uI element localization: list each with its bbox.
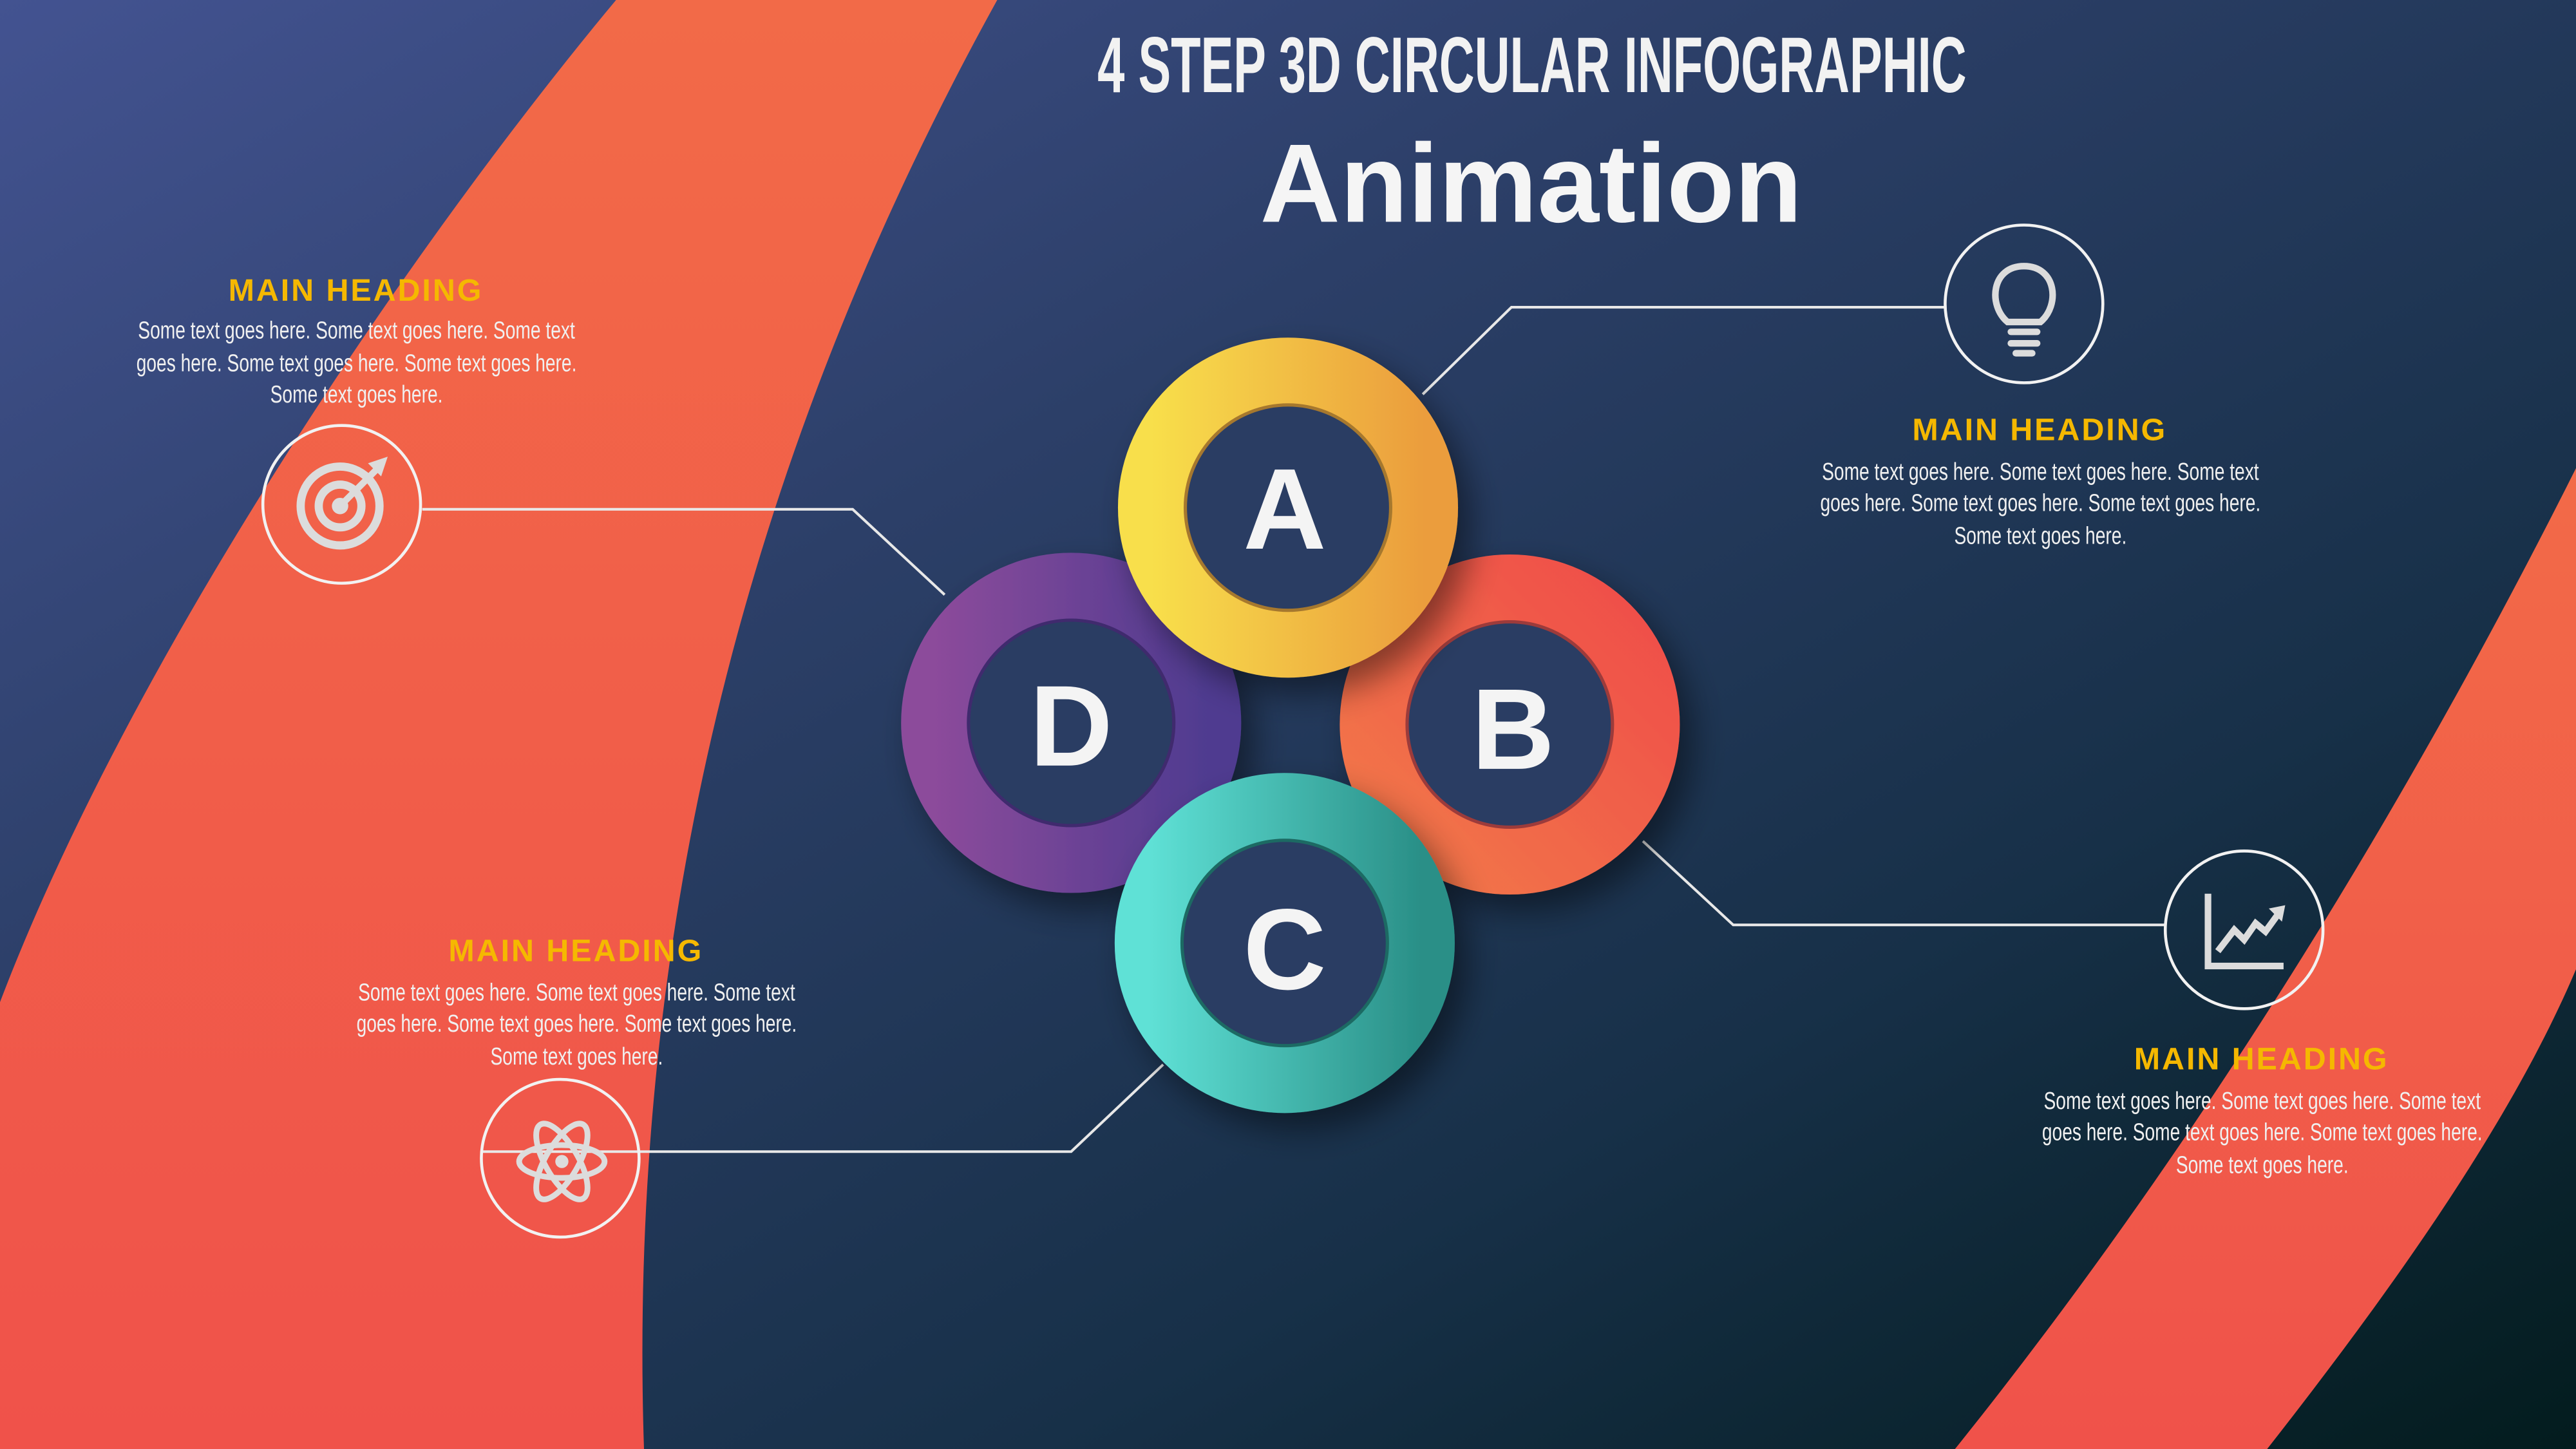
icon: lightbulb xyxy=(1945,225,2103,383)
text block: bottom right: MAIN HEADING xyxy=(2134,1042,2387,1077)
text block: top left: goes here. Some text goes here. Some text goes here. xyxy=(137,350,576,377)
text block: top left: Some text goes here. Some text goes here. Some text xyxy=(138,317,575,345)
subtitle: Animation xyxy=(1260,120,1802,245)
text block: top right xyxy=(1821,413,2260,549)
ring C xyxy=(1148,807,1421,1079)
connector: D xyxy=(422,509,945,594)
text block: bottom left: Some text goes here. Some text goes here. Some text xyxy=(358,979,795,1007)
text block: bottom left: MAIN HEADING xyxy=(448,933,701,968)
icon: chart xyxy=(2165,851,2323,1009)
text block: top left: Some text goes here. xyxy=(270,381,442,408)
text block: bottom left xyxy=(357,933,797,1070)
ring C: C xyxy=(1243,885,1326,1014)
text block: top right: goes here. Some text goes here. Some text goes here. xyxy=(1821,489,2260,516)
ring D: D xyxy=(1030,661,1113,790)
title: 4 STEP 3D CIRCULAR INFOGRAPHIC xyxy=(1097,21,1967,109)
ring B xyxy=(1374,588,1646,861)
text block: top right: Some text goes here. Some text goes here. Some text xyxy=(1822,458,2259,486)
text block: top right: Some text goes here. xyxy=(1954,522,2126,549)
ring B: B xyxy=(1472,665,1555,793)
text block: bottom right: Some text goes here. xyxy=(2176,1151,2349,1179)
ring A: A xyxy=(1243,444,1326,573)
connector: A xyxy=(1423,307,1945,394)
ring A xyxy=(1151,372,1425,644)
icon: target xyxy=(263,426,421,583)
text block: bottom left: Some text goes here. xyxy=(490,1043,663,1070)
text block: top left: MAIN HEADING xyxy=(229,273,481,308)
connector: C xyxy=(481,1065,1163,1151)
text block: bottom right xyxy=(2042,1042,2483,1179)
ring D xyxy=(935,587,1208,859)
decorative band left xyxy=(0,0,997,1449)
icon: atom xyxy=(481,1079,639,1237)
text block: bottom left: goes here. Some text goes here. Some text goes here. xyxy=(357,1010,797,1037)
text block: top right: MAIN HEADING xyxy=(1912,413,2165,448)
text block: top left xyxy=(137,273,576,408)
connector: B xyxy=(1643,841,2165,925)
decorative band right xyxy=(1955,468,2576,1449)
